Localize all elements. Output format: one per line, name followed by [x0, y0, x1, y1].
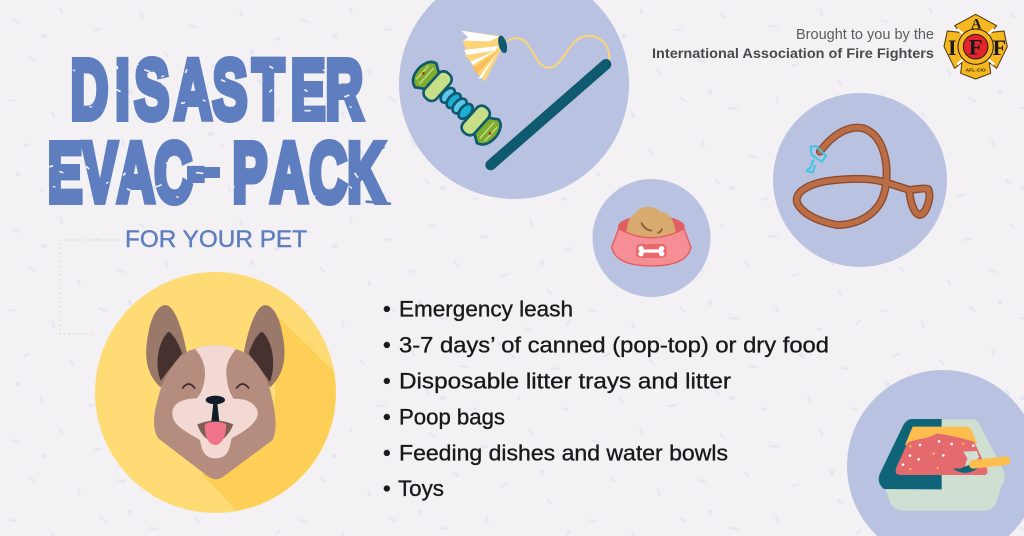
title: Disaster Evac-Pack: DISASTER [71, 43, 363, 137]
panel: litter tray circle [847, 370, 1024, 536]
title: Disaster Evac-Pack: EVAC-PACK [48, 121, 385, 220]
icon: dog face [146, 305, 336, 511]
icon: IAFF logo [944, 14, 1007, 79]
list item 4: Poop bags [399, 404, 505, 430]
list item 6: • [383, 476, 397, 501]
list item 5: • [383, 440, 397, 466]
credit: Brought to you by the IAFF: International Association of Fire Fighters [652, 46, 934, 61]
icon: wand toy with tassel [461, 31, 609, 165]
icon: litter tray [879, 419, 1006, 511]
list item 3: Disposable litter trays and litter [399, 368, 731, 394]
panel: toys circle [399, 0, 629, 199]
icon: IAFF logo: F [969, 35, 983, 60]
list item 5: Feeding dishes and water bowls [399, 440, 728, 466]
panel: food bowl circle [592, 179, 710, 297]
icon: IAFF logo: F [993, 35, 1006, 60]
list item 3: • [383, 368, 397, 394]
icon: leash [797, 128, 929, 225]
panel: leash circle [773, 93, 947, 267]
credit: Brought to you by the IAFF [652, 27, 934, 61]
icon: IAFF logo: A [971, 16, 982, 32]
icon: IAFF logo: AFL-CIO [966, 68, 986, 74]
list item 4: • [383, 404, 397, 430]
credit: Brought to you by the IAFF: Brought to you by the [796, 27, 934, 43]
subtitle: For your pet: FOR YOUR PET [125, 226, 307, 253]
list item 1: Emergency leash [399, 296, 573, 322]
checklist [383, 296, 829, 501]
icon: chew bone toy [407, 56, 506, 150]
list item 2: 3-7 days’ of canned (pop-top) or dry food [399, 332, 829, 358]
panel: dog circle [95, 272, 336, 513]
icon: food bowl [612, 207, 691, 266]
title: Disaster Evac-Pack [48, 43, 390, 220]
list item 6: Toys [398, 476, 444, 501]
list item 2: • [383, 332, 397, 358]
icon: IAFF logo: I [948, 35, 957, 60]
list item 1: • [383, 296, 397, 322]
